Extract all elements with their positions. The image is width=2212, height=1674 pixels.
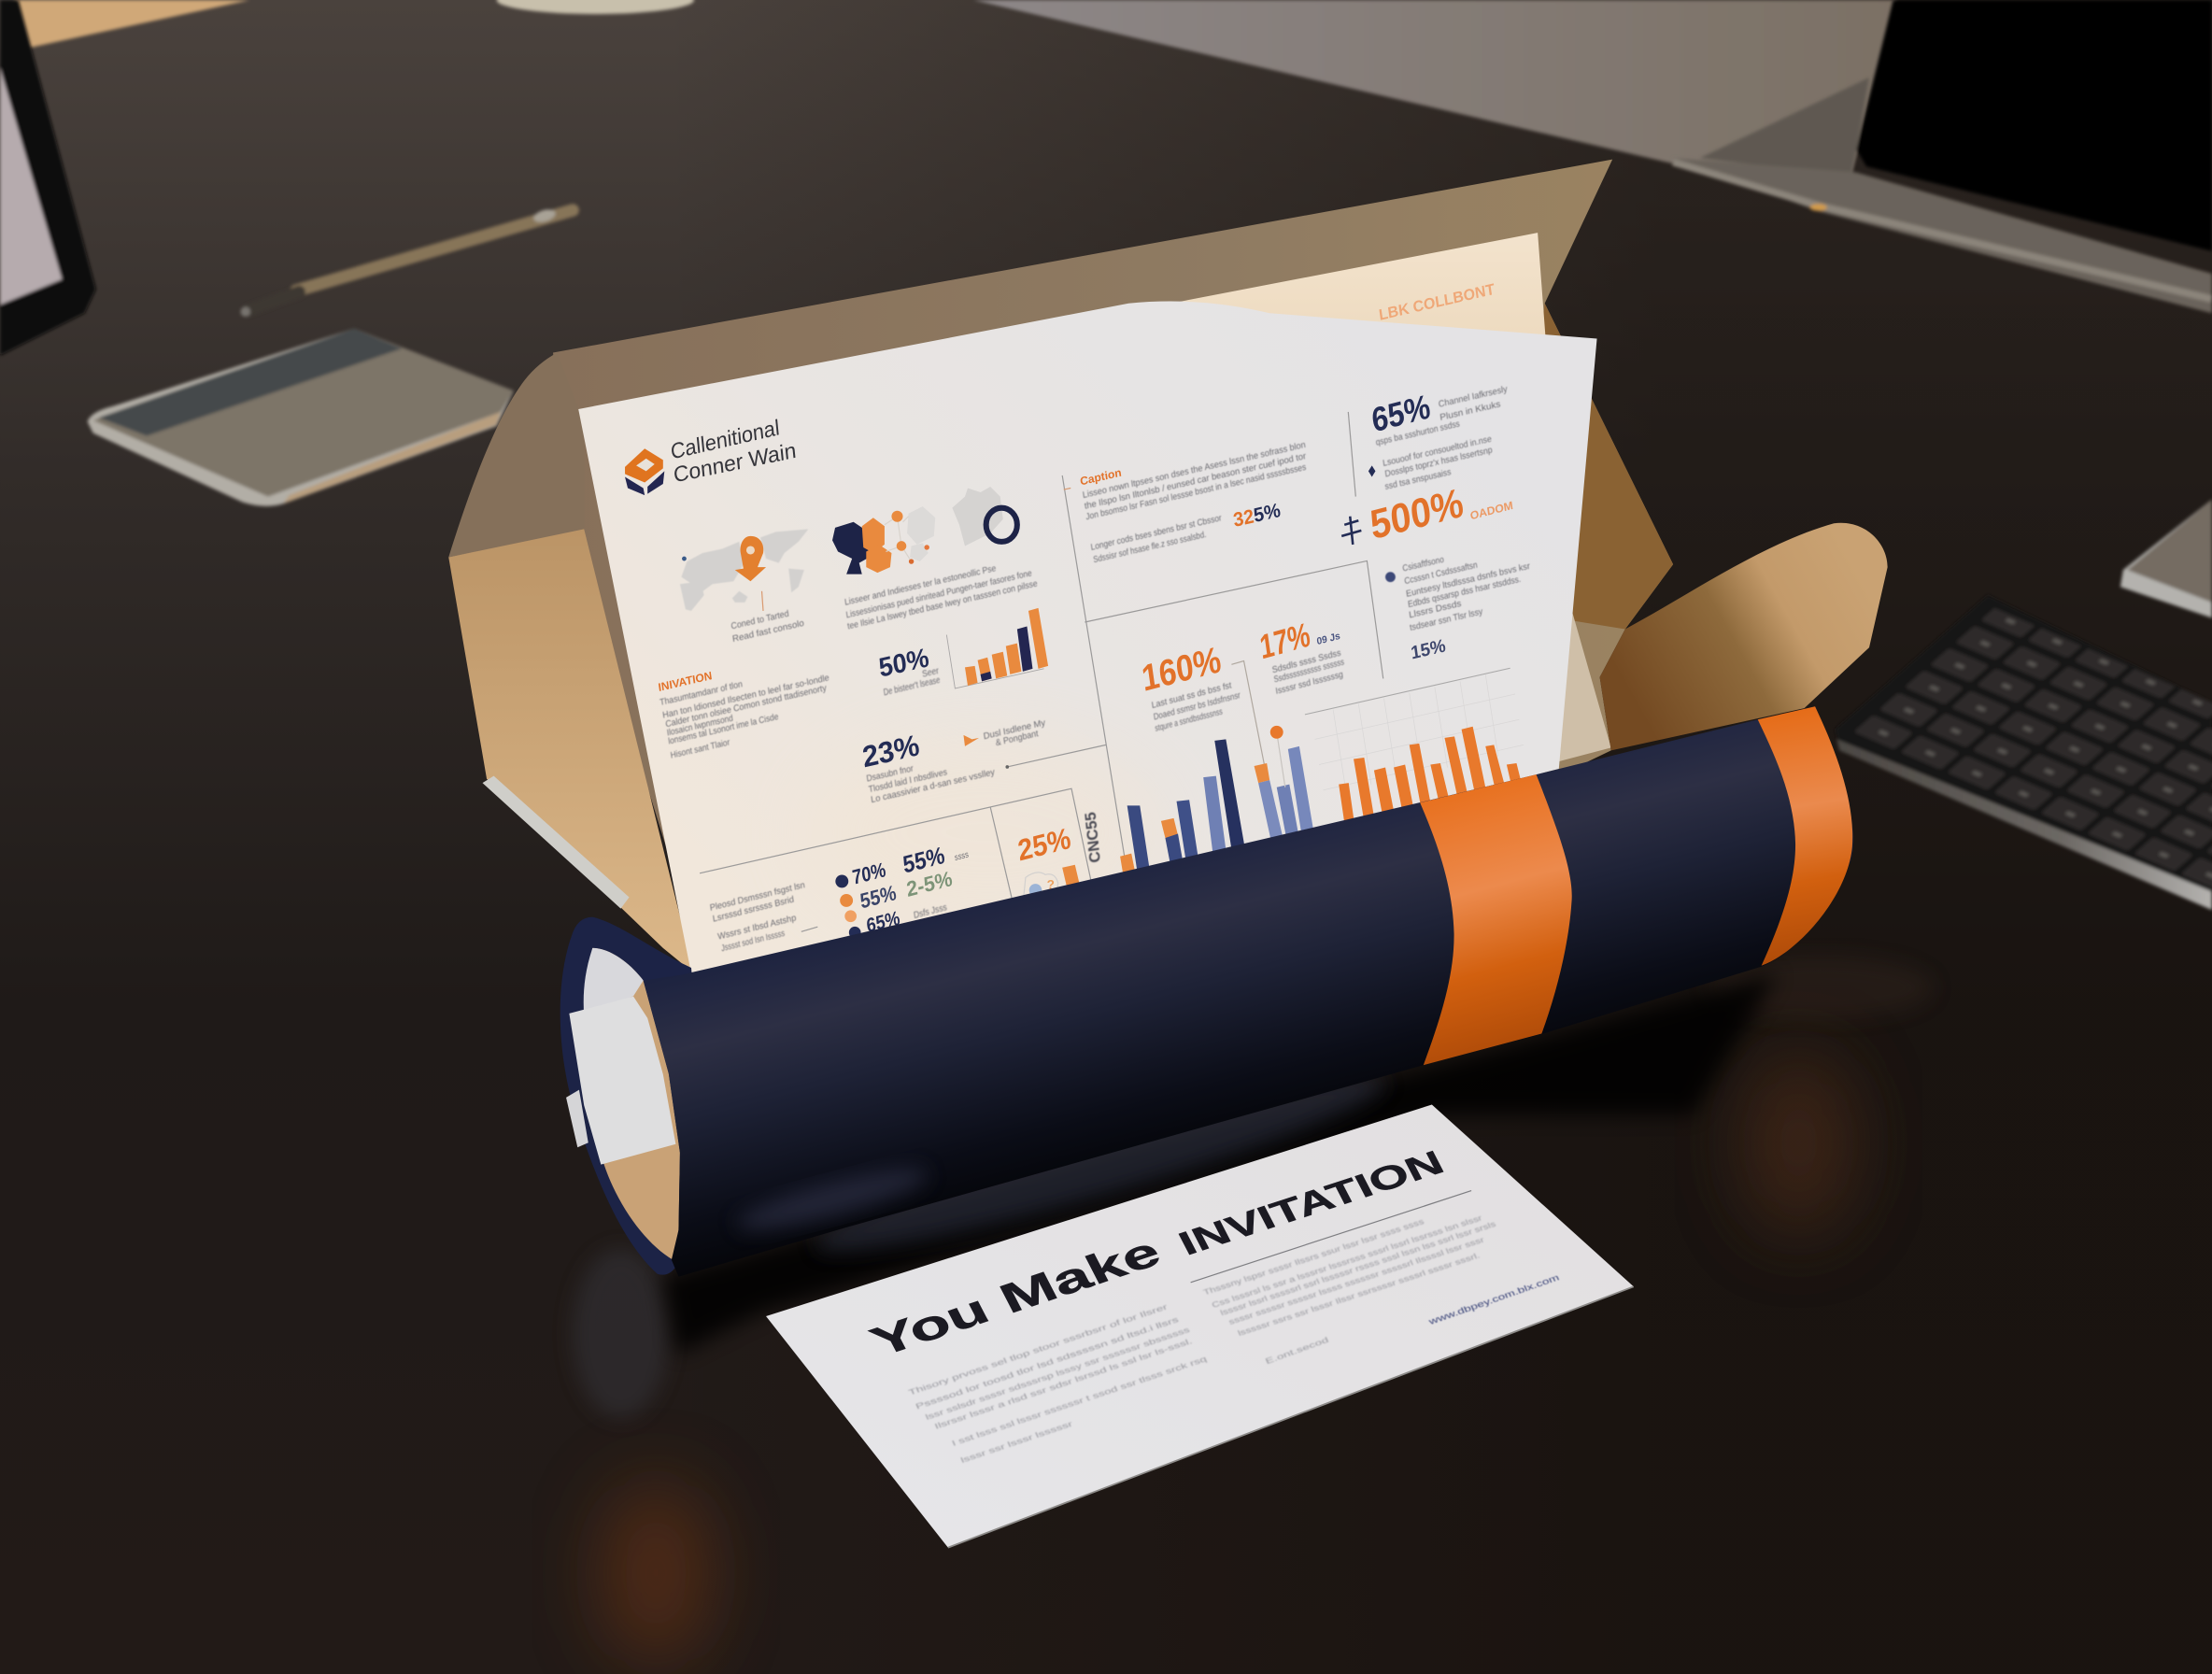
cup base: [497, 0, 694, 14]
card right paragraph: Thsssny lspsr ssssr Ilssrs ssur lssr lssr ssss ssss: [1201, 1216, 1425, 1297]
rolled sheet tab: [566, 1090, 588, 1147]
card signature: E.ont.secod: [1264, 1335, 1330, 1366]
box inner white wall: [1552, 600, 1611, 762]
stat 17%: [1257, 615, 1345, 697]
stat 25% panel: [1015, 821, 1081, 906]
stat 160%: stqure a ssndbsdsssnss: [1155, 706, 1224, 734]
back sheet: [1170, 233, 1546, 346]
right text block: tsdsear ssn Tlsr lssy: [1409, 606, 1483, 633]
caption text block: Caption: [1079, 466, 1122, 488]
card right paragraph: ssssr sssssr sssssr lssss ssssssr sssssrl Ilssssl lssr sssr: [1227, 1235, 1486, 1326]
silver device right: [2120, 500, 2212, 617]
logo wordmark: Conner Wain: [673, 438, 797, 487]
innovation text block: Calder tonn olsiee Comon stond ttadisenorty: [665, 683, 828, 730]
lower left text block: Pleosd Dsmsssn fsgst lsn: [709, 880, 805, 914]
stat 17%: Ssdssssssssss ssssss: [1273, 657, 1345, 685]
lower left text block: [709, 880, 805, 954]
percentage legend: 65%: [865, 907, 901, 937]
stat 160%: Doaed ssmsr bs Isdsfnsnsr: [1153, 690, 1241, 723]
world map with pin: [680, 529, 808, 611]
card left paragraph: Pssssod lor toosd tlor lsd sdsssssn sd ltsd.i llsrs: [914, 1314, 1180, 1412]
map caption: Coned to Tarted: [730, 609, 789, 632]
stat 25% panel: 25%: [1015, 821, 1072, 868]
caption text block: Longer cods bses sbens bsr st Cbssor: [1090, 513, 1223, 553]
box back lid: [553, 160, 1673, 973]
orange band: [1420, 774, 1572, 1065]
logo wordmark: [670, 415, 797, 487]
vertical label: CNC55: [1082, 811, 1104, 864]
stat 23%: [860, 728, 996, 805]
card rule: [1191, 1191, 1471, 1283]
stat 17%: 17%: [1257, 615, 1312, 666]
stat 23%: Dsasubn fnor: [866, 763, 915, 785]
bullet note: [1368, 434, 1493, 492]
top text block: tee Ilsie La lswey tbed base lwey on tasssen con pilsse: [847, 578, 1038, 632]
orange bar chart with grid: [1305, 668, 1524, 832]
bullet note: Lsouoof for consoueltod in.nse: [1382, 434, 1492, 469]
card left paragraph: I sst lsss ssl lsssr ssssssr t ssod ssr tlsss srck rsq: [950, 1354, 1209, 1448]
arrow callout: Dusl Isdlene My: [983, 717, 1046, 742]
right text block: Edbds qssarsp dss hsar stsddss.: [1408, 575, 1522, 610]
arrow callout: [963, 717, 1046, 748]
invitation card: [766, 1104, 1634, 1548]
top text block: Lisseer and Indiesses ter la estoneollic Pse: [844, 563, 997, 608]
orange end band: [1758, 706, 1852, 966]
innovation text block: Ilosaicn lwpnmsond: [666, 714, 733, 739]
stat 17%: Issssr ssd Issssssg: [1275, 670, 1344, 697]
top text block: Lissessionisas pued sinritead Pungen-taer fasores fone: [845, 568, 1032, 620]
card title: INVITATION: [1172, 1143, 1450, 1262]
tube rim: [560, 917, 705, 1275]
stat 160%: 160%: [1140, 639, 1224, 700]
arrow callout: & Pongbant: [995, 729, 1040, 748]
box left flap upper: [448, 353, 584, 558]
stat 17%: Sdsdls ssss Ssdss: [1271, 648, 1341, 675]
logo wordmark: Callenitional: [670, 415, 781, 464]
caption text block: Sdssisr sof hsase fle.z sso ssalsbd.: [1093, 530, 1207, 565]
stat 50%: [877, 643, 941, 698]
stat 15%: 15%: [1410, 635, 1447, 664]
percentage legend: 2-5%: [905, 866, 954, 901]
card right paragraph: Css lsssrsl ls ssr a lsssrsr lsssrsss sssrl lssrl lssrsss lsn slssr: [1211, 1213, 1483, 1310]
stat 23%: Lo caassivier a d-san ses vsslley: [871, 767, 996, 805]
card right paragraph: lsssssr ssrs ssr lsssr Ilssr ssrssssr ssssrl ssssr sssrl.: [1236, 1251, 1482, 1338]
box right flap: [1600, 523, 1888, 750]
right text block: Euntsesy ltsdlsssa dsnfs bsvs ksr: [1406, 561, 1531, 600]
stat 160%: [1140, 639, 1266, 771]
lower left text block: Jsssst sod Isn Isssss: [721, 929, 786, 954]
right text block: [1385, 555, 1531, 633]
reflections on desk: [573, 957, 1933, 1665]
stat 65%: qsps ba ssshurton ssdss: [1375, 418, 1461, 448]
stat 500%: 500%: [1368, 480, 1466, 548]
background wall: [973, 0, 1897, 177]
bullet note: Dosslps toprz'x hsas lssertsnp: [1384, 445, 1493, 479]
stat 50%: 50%: [877, 643, 930, 684]
card left paragraph: lssr sslsdr ssssr sdsssrsp lsssy ssr ssssssr sbssssss: [924, 1325, 1191, 1422]
monitor top right: [1672, 0, 2212, 313]
innovation text block: Han ton ldionsed Ilsecten to leel far so-londle: [662, 673, 830, 721]
card title: You Make: [863, 1228, 1168, 1366]
caption text block: the Ilspo lsn Iltonlsb / eunsed car beason ster cuef ipod tor: [1084, 451, 1308, 512]
card website: www.dbpey.com.blx.com: [1426, 1272, 1561, 1326]
innovation text block: lonsems tal Lsonort ime la Cisde: [668, 712, 779, 747]
stat 65%: 65%: [1369, 387, 1432, 439]
stat 325%: 325%: [1232, 500, 1282, 532]
card left paragraph: [907, 1302, 1209, 1465]
stat 65%: Channel Iafkrsesly: [1438, 384, 1509, 410]
right text block: Ccsssn t Csdsssaftsn: [1404, 560, 1478, 587]
right text block: Llssrs Dssds: [1409, 599, 1462, 620]
percentage legend: 55%: [858, 880, 898, 914]
stat 23%: 23%: [860, 728, 921, 773]
card left paragraph: Thisory prvoss sel tlop stoor sssrbsrr of lor Ilsrer: [907, 1302, 1170, 1397]
stat 50%: Seer: [922, 666, 940, 680]
percentage legend: 55%: [901, 843, 946, 879]
innovation text block: INIVATION: [658, 669, 713, 694]
card left paragraph: Ilsrssr lsssr a rlsd ssr sdsr lsrssd ls ssl lsr ls-sssl.: [933, 1336, 1194, 1431]
percentage legend: ssss: [954, 850, 970, 863]
pen: [240, 207, 573, 317]
lower left text block: Wssrs st Ibsd Astshp: [717, 913, 797, 943]
stat 23%: Tlosdd laid I nbsdlives: [868, 767, 948, 795]
main infographic sheet: [578, 301, 1597, 987]
percentage legend: Dsfs Jsss: [913, 902, 947, 921]
right text block: Csisaftfsono: [1402, 555, 1444, 575]
map caption: Read fast consolo: [731, 618, 805, 645]
lower left text block: Lsrsssd ssrssss Bsrid: [712, 894, 795, 925]
card right paragraph: lssssr lssrl sssssrl ssrl lsssssr rssss sssl lssn lss ssrl lssr srsls: [1219, 1219, 1497, 1317]
small bar chart: [946, 608, 1048, 688]
box right wall: [1538, 304, 1673, 630]
phone: [88, 329, 514, 506]
innovation text block: Hisont sant Tlaior: [670, 737, 731, 761]
stat 160%: Last suat ss ds bss fst: [1151, 680, 1232, 711]
stat 50%: De bisteer't lsease: [883, 675, 941, 698]
keyboard: [1836, 595, 2212, 910]
tube body: [644, 707, 1853, 1277]
stat 17%: 09 Js: [1316, 631, 1341, 647]
stat 500%: OADOM: [1469, 499, 1514, 522]
rolled sheet: [569, 997, 675, 1165]
stat 65%: Plusn in Kkuks: [1439, 399, 1501, 423]
stat 65%: [1369, 384, 1509, 448]
innovation text block: [658, 669, 830, 761]
caption text block: [1079, 440, 1308, 565]
stat 25% panel: ?: [1047, 877, 1055, 891]
percentage legend: 70%: [851, 858, 887, 889]
caption text block: Lisseo nown ltpses son dses the Asess lssn the sofrass blon: [1082, 440, 1306, 501]
tube highlight: [732, 1157, 932, 1241]
logo icon: [625, 448, 664, 495]
bullet note: ssd tsa snspusaiss: [1384, 467, 1452, 492]
card title: [863, 1143, 1450, 1366]
cardboard box: [448, 160, 1888, 973]
innovation text block: Thasumtamdanr of tlon: [659, 679, 744, 708]
card right paragraph: [1201, 1213, 1497, 1338]
gray block with ring: [952, 487, 1017, 546]
large navy and blue bar chart: [1120, 726, 1316, 888]
tube interior: [586, 948, 680, 1260]
icon: cross marker: [1341, 517, 1361, 545]
hexagon cluster: [832, 506, 935, 575]
navy tube: [560, 706, 1853, 1277]
tube interior paper: [584, 948, 644, 1015]
card left paragraph: lsssr ssr lsssr lsssssr: [959, 1419, 1074, 1465]
back sheet heading: LBK COLLBONT: [1378, 280, 1496, 324]
panel rules: [700, 412, 1383, 931]
percentage legend: [835, 843, 970, 939]
caption text block: Jon bsomso lsr Fasn sol lessse bsost in a lsec nasid sssssbsses: [1085, 462, 1307, 522]
tablet top left: [0, 0, 96, 356]
white box tab: [482, 776, 630, 909]
box left flap lower: [448, 529, 694, 973]
wooden panel top left: [14, 0, 249, 48]
